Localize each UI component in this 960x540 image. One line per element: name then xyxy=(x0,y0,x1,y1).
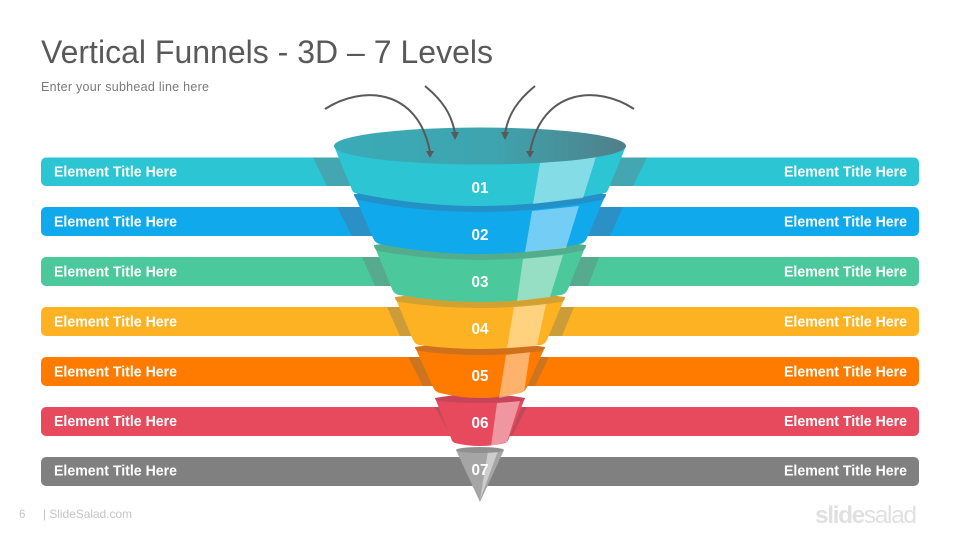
funnel level 2: 02 xyxy=(472,227,489,244)
funnel level 1 xyxy=(334,128,626,206)
band 1: Element Title Here xyxy=(54,164,177,180)
band 2: Element Title Here xyxy=(784,214,907,230)
band 1: Element Title Here xyxy=(784,164,907,180)
band 7: Element Title Here xyxy=(784,464,907,480)
funnel level 1: 01 xyxy=(472,180,489,197)
funnel level 7 xyxy=(456,447,504,502)
band 2 xyxy=(41,207,919,236)
band 5: Element Title Here xyxy=(54,364,177,380)
band 2: Element Title Here xyxy=(54,214,177,230)
band 6: Element Title Here xyxy=(784,414,907,430)
footer source: | SlideSalad.com xyxy=(43,507,132,521)
band 3: Element Title Here xyxy=(54,264,177,280)
arrows into funnel xyxy=(325,86,634,158)
band 6: Element Title Here xyxy=(54,414,177,430)
funnel level 2 xyxy=(354,186,606,254)
band 4 xyxy=(41,307,919,336)
band 3: Element Title Here xyxy=(784,264,907,280)
page number: 6 xyxy=(19,509,25,521)
funnel level 3 xyxy=(374,238,586,302)
band 7 xyxy=(41,457,919,486)
funnel level 6 xyxy=(435,394,525,446)
funnel level 4 xyxy=(395,291,565,349)
title: Vertical Funnels - 3D – 7 Levels xyxy=(41,34,493,70)
logo wordmark: slidesalad xyxy=(815,502,917,529)
band 6 xyxy=(41,407,919,436)
funnel level 5: 05 xyxy=(472,368,489,385)
funnel level 5 xyxy=(415,342,545,398)
funnel level 3: 03 xyxy=(472,274,489,291)
funnel level 6: 06 xyxy=(472,415,489,432)
funnel level 4: 04 xyxy=(472,321,489,338)
band 1 xyxy=(41,158,919,186)
band 4: Element Title Here xyxy=(54,314,177,330)
band 3 xyxy=(41,257,919,286)
band 7: Element Title Here xyxy=(54,464,177,480)
subhead: Enter your subhead line here xyxy=(41,80,209,94)
band 4: Element Title Here xyxy=(784,314,907,330)
band 5 xyxy=(41,357,919,386)
band 5: Element Title Here xyxy=(784,364,907,380)
funnel level 7: 07 xyxy=(472,462,489,479)
